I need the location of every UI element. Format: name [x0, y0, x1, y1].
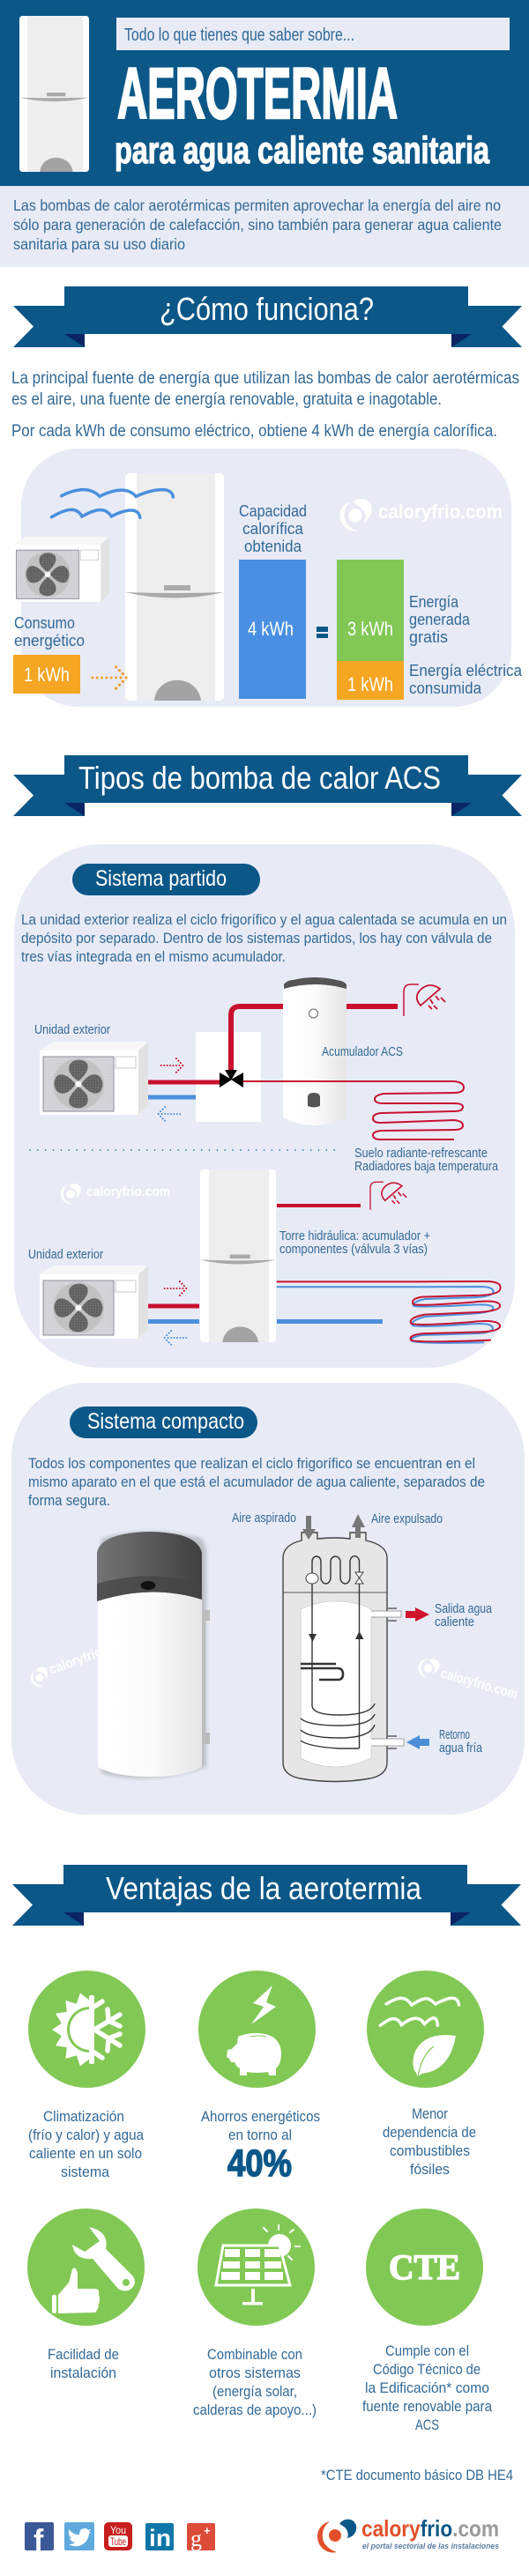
text: sistema compacto	[28, 1455, 485, 1509]
text: sistema partido	[21, 911, 507, 965]
heading ribbon: como funciona	[13, 286, 522, 347]
icon: youtube	[104, 2522, 132, 2550]
label: consumo: energético	[14, 632, 85, 650]
text: Facilidad de	[48, 2346, 119, 2363]
white box: indoor module	[196, 1032, 261, 1122]
bar: 1 kWh: 1 kWh	[347, 673, 393, 695]
text: fuente renovable para	[362, 2398, 492, 2415]
intro text band	[0, 186, 529, 267]
bar: 4 kWh: 4 kWh	[248, 618, 294, 640]
label: energia gratis: gratis	[409, 628, 448, 646]
appliance: compact heat pump	[97, 1532, 210, 1778]
pill: sistema compacto	[70, 1407, 257, 1438]
text: dependencia de	[383, 2124, 476, 2141]
label: salida agua caliente: caliente	[435, 1615, 474, 1629]
text: sistema partido: tres vías integrada en el mismo acumulador.	[21, 948, 286, 965]
text: en torno al	[228, 2127, 292, 2143]
label: torre hidraulica: Torre hidráulica: acumulador +	[279, 1229, 430, 1243]
watermark: caloryfrio.com	[48, 1635, 131, 1678]
icon: CTE: CTE	[389, 2247, 460, 2287]
icon: wind and leaf	[367, 1971, 484, 2088]
text: ACS	[415, 2416, 439, 2433]
text: sistema	[61, 2164, 110, 2180]
text	[28, 2108, 144, 2180]
label: energia gratis: generada	[409, 611, 471, 628]
text: instalación	[50, 2364, 116, 2381]
underfloor coil	[277, 1281, 501, 1343]
label: salida agua caliente: Salida agua	[435, 1601, 493, 1616]
label: energia gratis	[409, 593, 471, 646]
icon: wind	[52, 490, 173, 517]
pill: sistema partido: Sistema partido	[95, 866, 227, 891]
pipe: hot outlet	[277, 1204, 361, 1207]
label: retorno agua fria: Retorno	[439, 1727, 470, 1742]
label: capacidad	[239, 502, 307, 555]
label: aire aspirado: Aire aspirado	[232, 1511, 296, 1526]
label: suelo radiante: Suelo radiante-refrescante	[354, 1146, 488, 1161]
label: suelo radiante: Radiadores baja temperatura	[354, 1159, 499, 1174]
label: aire expulsado: Aire expulsado	[371, 1512, 443, 1526]
logo: caloryfrio	[317, 2515, 499, 2552]
arrow: air in	[302, 1516, 316, 1540]
label: suelo radiante	[354, 1146, 499, 1174]
pipe: hot water loop	[148, 1006, 464, 1140]
text: explanation	[11, 369, 519, 441]
text	[383, 2105, 476, 2178]
text: (frío y calor) y agua	[28, 2127, 144, 2143]
text: (energía solar,	[212, 2383, 297, 2400]
text: sistema compacto: Todos los componentes que realizan el ciclo frigorífico se encuentran en el	[28, 1455, 475, 1472]
label: torre hidraulica	[279, 1229, 430, 1257]
icon: facebook	[25, 2522, 54, 2557]
icon: sun and snowflake	[28, 1971, 145, 2088]
tagline: el portal sectorial de las instalaciones	[362, 2542, 499, 2551]
pill: sistema partido	[72, 864, 260, 895]
subtitle box	[116, 18, 510, 50]
bar: 4 kWh	[239, 560, 306, 699]
watermark: caloryfrio.com	[86, 1184, 170, 1199]
panel: how it works	[13, 449, 523, 707]
pill: sistema compacto: Sistema compacto	[87, 1409, 244, 1434]
label: energia gratis: Energía	[409, 593, 459, 611]
watermark: caloryfrio.com	[378, 501, 503, 523]
icon: twitter	[64, 2522, 94, 2550]
icon: wrench and thumb	[27, 2209, 145, 2326]
text: Ahorros energéticos	[201, 2108, 320, 2125]
bar: 1 kWh	[337, 661, 404, 700]
label: retorno agua fria	[439, 1727, 483, 1756]
icon: outdoor unit	[40, 1266, 148, 1339]
advantage: instalacion	[27, 2209, 145, 2381]
icon: CTE	[366, 2209, 483, 2326]
label: energia electrica: consumida	[409, 679, 482, 697]
text: Combinable con	[207, 2346, 302, 2363]
text: otros sistemas	[209, 2364, 301, 2381]
heading ribbon: ventajas: Ventajas de la aerotermia	[106, 1870, 422, 1906]
advantage: ahorros	[198, 1971, 320, 2185]
text: combustibles	[390, 2142, 470, 2159]
text	[48, 2346, 119, 2381]
heading ribbon: ventajas	[12, 1865, 521, 1926]
icon: shower	[370, 1182, 406, 1210]
text: caliente en un solo	[29, 2145, 142, 2162]
subtitle box: Todo lo que tienes que saber sobre...	[124, 26, 354, 45]
stat: 40%: 40%	[227, 2142, 292, 2185]
watermark	[61, 1184, 170, 1204]
icon: linkedin: in	[149, 2525, 171, 2551]
text: la Edificación* como	[365, 2379, 489, 2396]
text	[362, 2342, 492, 2433]
arrow: blue dotted	[164, 1330, 186, 1346]
box: 1 kWh: 1 kWh	[24, 664, 70, 686]
text	[193, 2346, 317, 2418]
advantage: combustibles	[367, 1971, 484, 2178]
label: capacidad: calorífica	[242, 520, 304, 538]
icon: hydraulic tower	[200, 1169, 276, 1342]
advantage: climatizacion	[28, 1971, 145, 2180]
icon: facebook: f	[34, 2524, 44, 2557]
bar: 3 kWh	[337, 560, 404, 661]
advantage: combinable	[193, 2209, 317, 2418]
label: retorno agua fria: agua fría	[439, 1741, 483, 1756]
icon: logo swirl	[317, 2520, 356, 2552]
pipes: to outdoor unit	[148, 1304, 199, 1324]
panel: sistema compacto	[11, 1383, 525, 1815]
text: Climatización	[43, 2108, 124, 2125]
arrow: cold in	[406, 1735, 429, 1749]
text: Menor	[412, 2105, 448, 2122]
header band	[0, 0, 529, 186]
icon: google plus: +	[204, 2524, 211, 2537]
label: consumo	[14, 614, 85, 650]
heading ribbon: tipos	[13, 755, 522, 816]
arrow: red dotted	[165, 1281, 187, 1296]
arrow: red dotted	[161, 1058, 183, 1073]
equals sign	[317, 627, 328, 638]
heading ribbon: como funciona: ¿Cómo funciona?	[160, 291, 374, 327]
social icons	[25, 2522, 215, 2557]
icon: google plus: g	[190, 2526, 202, 2551]
icon: shower	[404, 984, 445, 1016]
arrow: air out	[352, 1514, 365, 1538]
watermark	[340, 499, 503, 531]
text: Código Técnico de	[373, 2361, 481, 2378]
icon: youtube: Tube	[110, 2535, 126, 2548]
label: acumulador: Acumulador ACS	[322, 1044, 403, 1059]
label: energia electrica: Energía eléctrica	[409, 662, 523, 679]
label: unidad exterior: Unidad exterior	[28, 1247, 103, 1262]
pipe: cold water	[148, 1095, 196, 1100]
label: capacidad: Capacidad	[239, 502, 307, 520]
label: energia electrica	[409, 662, 523, 697]
pipe: blue thick	[277, 1319, 383, 1324]
arrow: hot out	[406, 1607, 429, 1622]
dotted divider	[30, 1149, 338, 1151]
box: 1 kWh	[13, 655, 80, 694]
text: sistema compacto: forma segura.	[28, 1492, 110, 1509]
watermark	[416, 1655, 520, 1704]
diagram: tank cross section	[283, 1533, 404, 1782]
text: sistema compacto: mismo aparato en el que está el acumulador de agua caliente, separados de	[28, 1474, 485, 1490]
intro text band: sanitaria para su uso diario	[13, 235, 185, 253]
panel: sistema partido	[14, 844, 515, 1368]
arrow: blue dotted	[158, 1106, 180, 1122]
label: capacidad: obtenida	[244, 538, 302, 555]
icon: boiler	[19, 16, 89, 172]
advantage: CTE	[362, 2209, 492, 2433]
text: sistema partido: depósito por separado. Dentro de los sistemas partidos, los hay con válvula de	[21, 930, 492, 947]
bar: 3 kWh: 3 kWh	[347, 618, 393, 640]
icon: youtube: You	[110, 2524, 126, 2536]
icon: outdoor unit	[13, 537, 109, 602]
text	[201, 2108, 320, 2143]
text: fósiles	[410, 2161, 450, 2178]
text: calderas de apoyo...)	[193, 2402, 317, 2418]
tank: acumulador	[283, 977, 346, 1125]
icon: google plus	[187, 2523, 215, 2551]
watermark	[27, 1635, 132, 1689]
icon: bolt and piggy bank	[198, 1971, 316, 2088]
label: unidad exterior: Unidad exterior	[34, 1022, 110, 1037]
label: torre hidraulica: componentes (válvula 3 vías)	[279, 1242, 428, 1257]
wordmark: caloryfrio.com	[361, 2515, 499, 2542]
icon: outdoor unit	[40, 1042, 148, 1115]
icon: boiler large	[125, 473, 224, 701]
text: explanation: es el aire, una fuente de energía renovable, gratuita e inagotable.	[11, 390, 442, 409]
label: consumo: Consumo	[14, 614, 75, 632]
heading ribbon: tipos: Tipos de bomba de calor ACS	[78, 760, 441, 796]
icon: three way valve	[220, 1070, 243, 1088]
label: salida agua caliente	[435, 1601, 493, 1629]
icon: solar panel	[197, 2209, 315, 2326]
arrow: orange dotted	[93, 665, 128, 690]
text: Cumple con el	[385, 2342, 469, 2359]
